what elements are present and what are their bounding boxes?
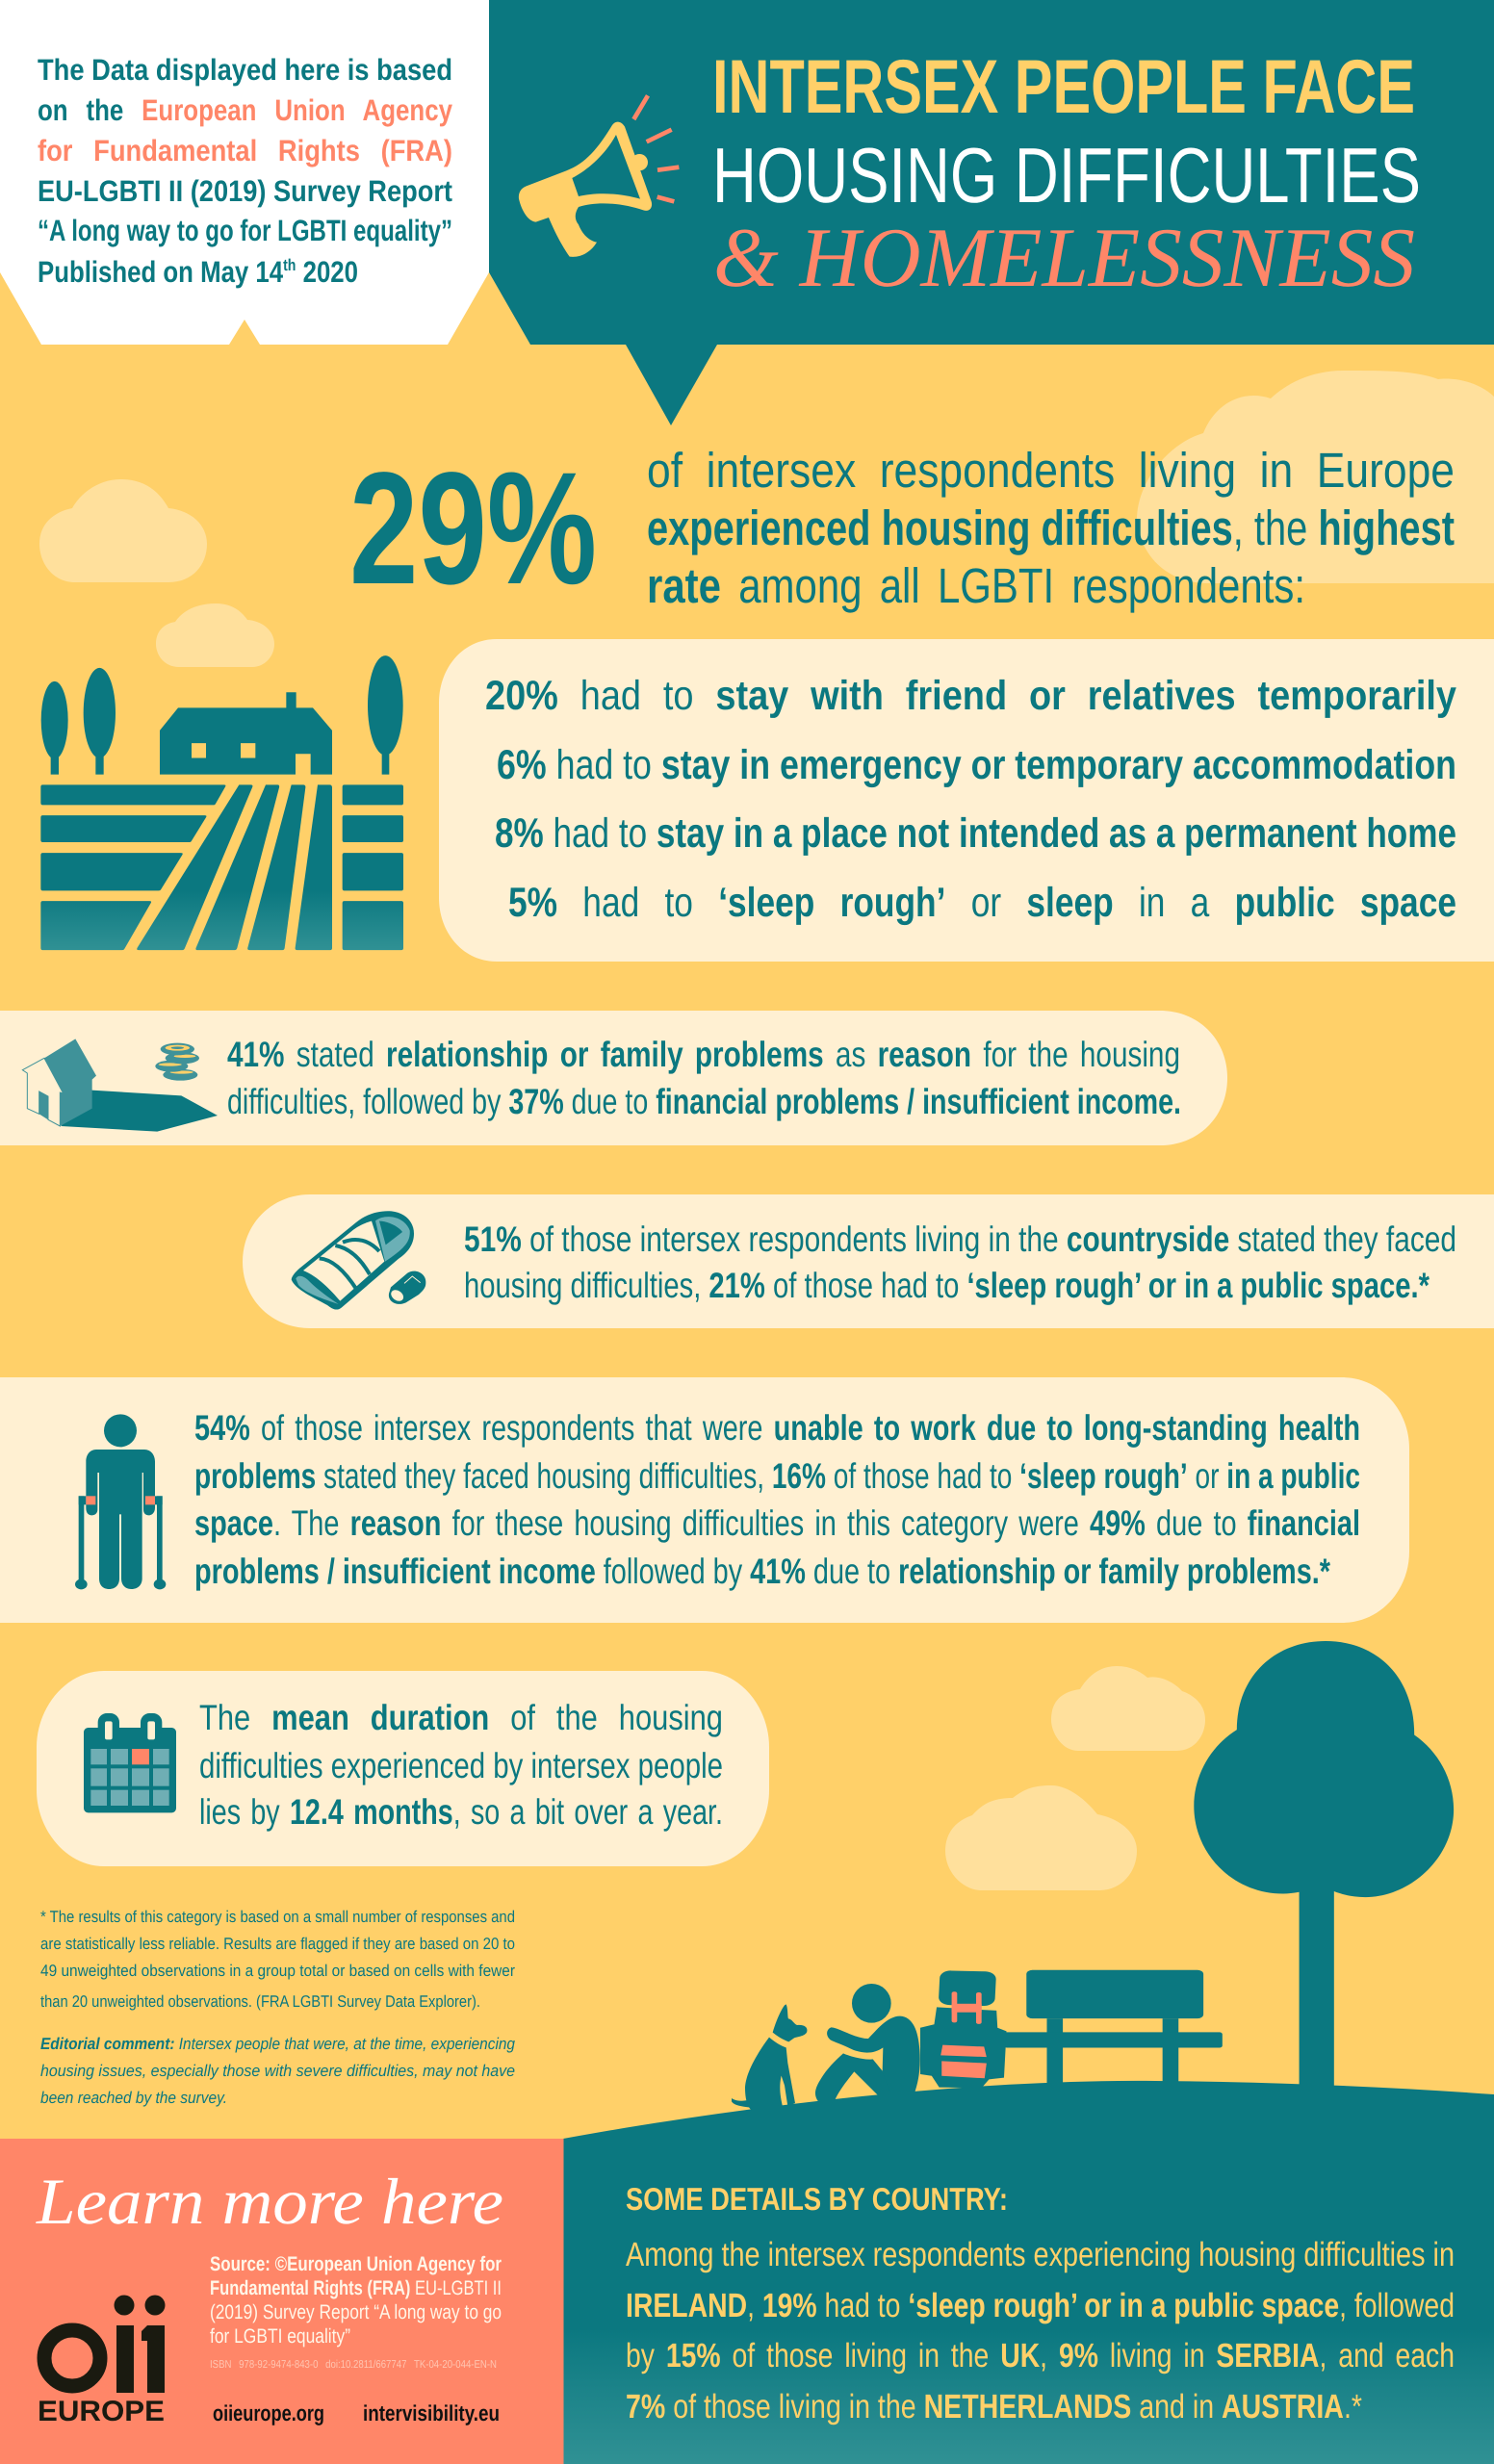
footnote: than 20 unweighted observations. (FRA LGBTI Survey Data Explorer). bbox=[40, 1992, 480, 2011]
country details text: IRELAND, 19% had to ‘sleep rough’ or in a public space, followed bbox=[626, 2287, 1455, 2324]
footnote bbox=[40, 1908, 515, 2107]
breakdown text lines: 5% had to ‘sleep rough’ or sleep in a public space bbox=[508, 880, 1456, 926]
footnote: 49 unweighted observations in a group total or based on cells with fewer bbox=[40, 1962, 515, 1980]
icon: house with shadow bbox=[22, 1039, 218, 1132]
source note text: The Data displayed here is based bbox=[38, 53, 452, 87]
source citation bbox=[210, 2253, 502, 2348]
country details text: by 15% of those living in the UK, 9% living in SERBIA, and each bbox=[626, 2337, 1455, 2374]
source note text: for Fundamental Rights (FRA) bbox=[38, 134, 452, 167]
breakdown text lines bbox=[485, 673, 1456, 926]
source note text: Published on May 14 bbox=[38, 255, 333, 289]
countryside text: 51% of those intersex respondents living in the countryside stated they faced bbox=[464, 1219, 1456, 1259]
icon: person with crutches bbox=[75, 1414, 166, 1589]
mean duration text: lies by 12.4 months, so a bit over a year. bbox=[199, 1792, 723, 1832]
link: oiieurope.org: oiieurope.org bbox=[213, 2400, 324, 2426]
panel: title speech bubble bbox=[489, 0, 1494, 425]
illustration: tree bbox=[1194, 1641, 1454, 2088]
reasons text: 41% stated relationship or family problems as reason for the housing bbox=[227, 1035, 1180, 1074]
unable to work text: problems / insufficient income followed by 41% due to relationship or family problems.* bbox=[194, 1552, 1330, 1591]
countryside text bbox=[464, 1219, 1456, 1305]
heading: some details by country: SOME DETAILS BY COUNTRY: bbox=[626, 2181, 1008, 2217]
cloud: upper park bbox=[1051, 1666, 1205, 1751]
footnote: been reached by the survey. bbox=[40, 2089, 227, 2107]
unable to work text: space. The reason for these housing difficulties in this category were 49% due to financial bbox=[194, 1503, 1360, 1543]
unable to work text bbox=[194, 1408, 1360, 1591]
reasons text bbox=[227, 1035, 1181, 1121]
logo: OII Europe bbox=[38, 2295, 166, 2427]
stat description: rate among all LGBTI respondents: bbox=[647, 558, 1305, 613]
illustration: backpack bbox=[920, 1970, 1007, 2088]
cloud: left bbox=[39, 479, 207, 582]
panel: learn more bbox=[0, 2139, 564, 2464]
country details text bbox=[626, 2236, 1455, 2426]
source citation: for LGBTI equality” bbox=[210, 2325, 350, 2348]
source note text bbox=[38, 53, 453, 289]
source note text: EU-LGBTI II (2019) Survey Report bbox=[38, 174, 452, 208]
panel: mean duration bbox=[37, 1671, 769, 1866]
footnote: * The results of this category is based on a small number of responses and bbox=[40, 1908, 515, 1926]
source note text: th bbox=[283, 256, 296, 274]
source note text: on the European Union Agency bbox=[38, 93, 453, 127]
mean duration text: difficulties experienced by intersex people bbox=[199, 1746, 723, 1785]
logo: OII Europe: EUROPE bbox=[38, 2396, 165, 2427]
source citation: Source: ©European Union Agency for bbox=[210, 2253, 502, 2275]
cloud: lower park bbox=[945, 1785, 1137, 1890]
link: intervisibility.eu: intervisibility.eu bbox=[363, 2400, 500, 2426]
panel: unable to work bbox=[0, 1377, 1409, 1623]
heading: learn more here: Learn more here bbox=[36, 2165, 503, 2238]
footnote: are statistically less reliable. Results are flagged if they are based on 20 to bbox=[40, 1935, 515, 1953]
icon: megaphone bbox=[519, 95, 679, 257]
panel: source note bbox=[0, 0, 489, 345]
illustration: dog bbox=[732, 2004, 807, 2110]
source note text: 2020 bbox=[296, 255, 358, 289]
country details text: 7% of those living in the NETHERLANDS and in AUSTRIA.* bbox=[626, 2388, 1362, 2426]
title bbox=[712, 43, 1421, 305]
illustration: bench bbox=[1004, 1970, 1223, 2084]
panel: country details bbox=[563, 2081, 1494, 2464]
source note text: “A long way to go for LGBTI equality” bbox=[38, 214, 452, 247]
unable to work text: problems stated they faced housing difficulties, 16% of those had to ‘sleep rough’ or in a public bbox=[194, 1456, 1360, 1496]
icon: calendar bbox=[84, 1713, 176, 1812]
title: & HOMELESSNESS bbox=[713, 212, 1415, 305]
mean duration text: The mean duration of the housing bbox=[199, 1698, 723, 1737]
panel: reasons for housing difficulties bbox=[0, 1011, 1227, 1145]
panel: countryside bbox=[243, 1194, 1494, 1328]
cloud: top right bbox=[1137, 371, 1494, 583]
icon: sleeping bag bbox=[292, 1211, 425, 1310]
stat description: experienced housing difficulties, the highest bbox=[647, 500, 1455, 555]
footnote: housing issues, especially those with severe difficulties, may not have bbox=[40, 2062, 515, 2080]
icon: stack of coins bbox=[155, 1043, 199, 1081]
mean duration text bbox=[199, 1698, 723, 1832]
panel: housing difficulty breakdown bbox=[439, 639, 1494, 962]
publication identifiers: ISBN 978-92-9474-843-0 doi:10.2811/667747 TK-04-20-044-EN-N bbox=[210, 2359, 497, 2371]
unable to work text: 54% of those intersex respondents that were unable to work due to long-standing health bbox=[194, 1408, 1360, 1448]
illustration: person sitting bbox=[815, 1984, 920, 2101]
stat description bbox=[647, 443, 1455, 613]
source citation: Fundamental Rights (FRA) EU-LGBTI II bbox=[210, 2277, 502, 2299]
source citation: (2019) Survey Report “A long way to go bbox=[210, 2301, 502, 2323]
reasons text: difficulties, followed by 37% due to financial problems / insufficient income. bbox=[227, 1082, 1181, 1121]
cloud: middle bbox=[156, 603, 274, 667]
stat: 29 percent: 29% bbox=[349, 440, 597, 618]
icon: farm with trees and fields bbox=[40, 655, 403, 950]
footnote: Editorial comment: Intersex people that were, at the time, experiencing bbox=[40, 2035, 515, 2053]
